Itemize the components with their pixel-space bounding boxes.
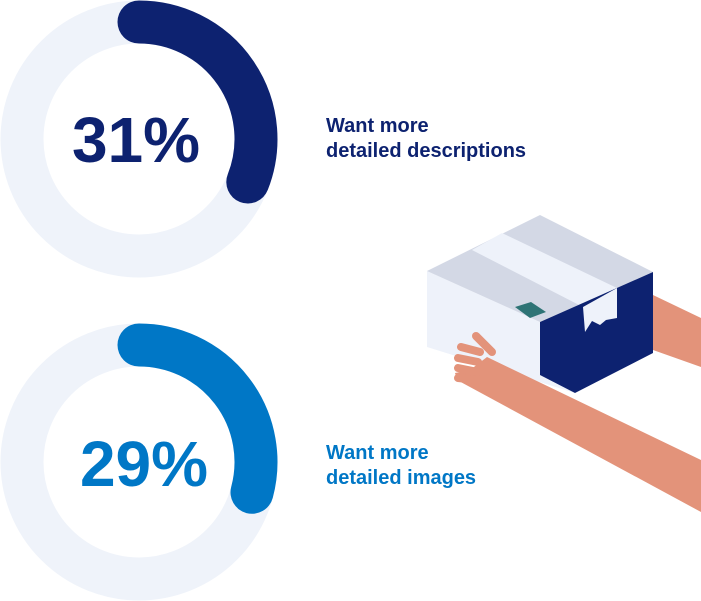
label: images: detailed images bbox=[326, 467, 476, 489]
label: images bbox=[326, 442, 476, 489]
donut chart: 31%: 31% bbox=[72, 104, 200, 176]
illustration: hands holding box bbox=[427, 215, 701, 512]
donut chart: 29% bbox=[22, 345, 256, 579]
label: descriptions bbox=[326, 115, 526, 162]
label: descriptions: detailed descriptions bbox=[326, 140, 526, 162]
donut chart: 29%: 29% bbox=[80, 428, 208, 500]
label: images: Want more bbox=[326, 442, 429, 464]
label: descriptions: Want more bbox=[326, 115, 429, 137]
donut chart: 31% bbox=[22, 22, 256, 256]
